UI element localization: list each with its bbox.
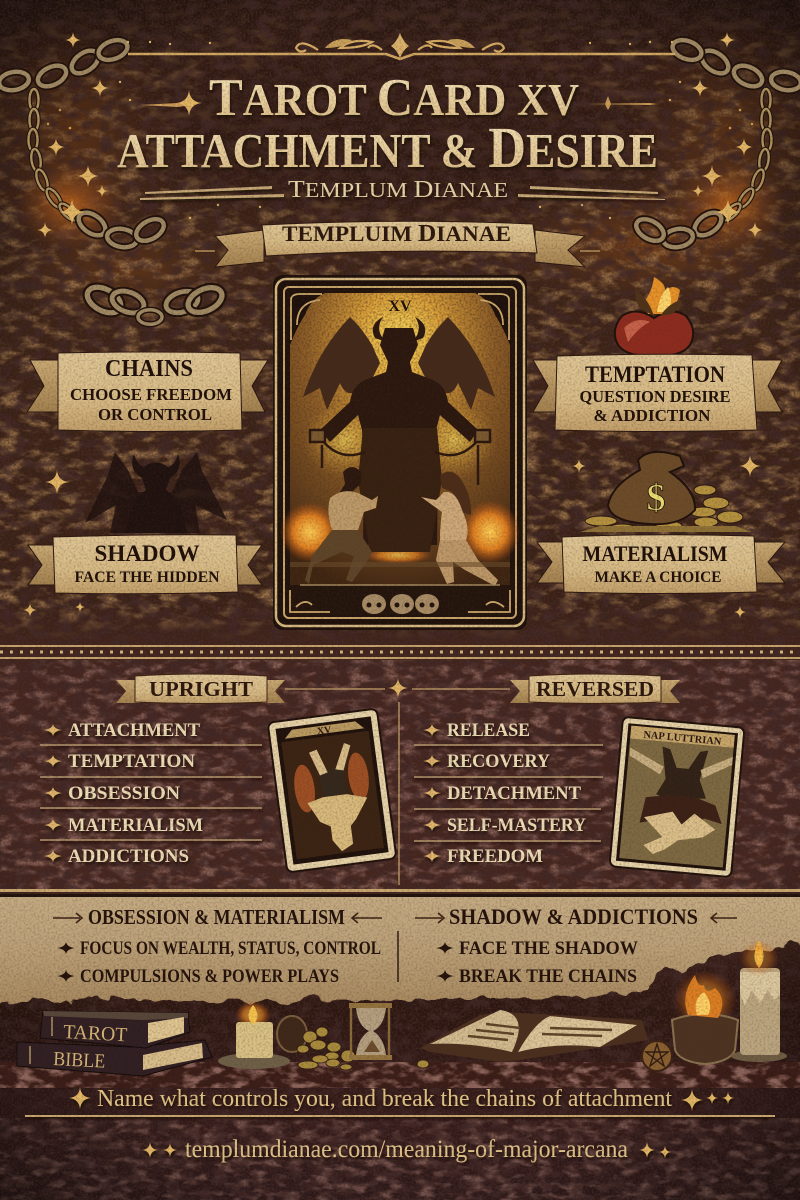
upright heading banner: UPRIGHT (149, 677, 253, 701)
title sparkles (140, 90, 657, 116)
banner: templuim dianae (195, 221, 600, 267)
heading: materialism: MATERIALISM (582, 541, 728, 566)
icon: money bag and coins (580, 452, 752, 532)
parchment text: left column: FOCUS ON WEALTH, STATUS, CONTROL (80, 938, 381, 959)
card: upright small (268, 708, 396, 873)
icon: small candle (218, 1001, 290, 1069)
card: reversed small (609, 717, 745, 877)
parchment text: right column: BREAK THE CHAINS (459, 966, 637, 987)
motto (25, 1086, 775, 1116)
section divider (0, 645, 800, 659)
list: upright: ADDICTIONS (68, 846, 189, 867)
devil chains (310, 430, 490, 485)
list: reversed: DETACHMENT (447, 783, 581, 804)
reversed heading banner (510, 674, 680, 704)
icon: burning bowl (672, 970, 738, 1064)
text: make a choice: MAKE A CHOICE (594, 569, 722, 586)
url footer: templumdianae.com/meaning-of-major-arcana (185, 1136, 628, 1163)
subtitle: TEMPLUM DIANAE (288, 177, 508, 203)
list: upright: ATTACHMENT (68, 720, 200, 741)
card: reversed small: NAP LUTTRIAN (643, 730, 722, 748)
icon: books: BIBLE (53, 1048, 106, 1073)
kneeling man (305, 467, 378, 584)
text: and addiction: & ADDICTION (594, 406, 711, 425)
icon: big candle (731, 940, 787, 1062)
text: or control: OR CONTROL (98, 405, 212, 424)
parchment text: right column (398, 904, 737, 987)
chains: top right corner (539, 32, 800, 250)
main tarot card (273, 275, 527, 630)
list: reversed: SELF-MASTERY (447, 815, 586, 836)
text: face the hidden: FACE THE HIDDEN (74, 569, 220, 586)
chains: top left corner (0, 32, 261, 250)
icon: open book (420, 1010, 648, 1062)
list: reversed: RELEASE (447, 720, 530, 741)
panel: materialism (537, 535, 785, 594)
panel: shadow (28, 535, 262, 594)
list: upright: TEMPTATION (68, 751, 195, 772)
icon: broken chain (83, 282, 226, 324)
card corner flourishes (290, 293, 510, 612)
list: upright (40, 720, 262, 867)
icon: books (17, 1011, 212, 1076)
list: upright: MATERIALISM (68, 815, 203, 836)
icon: pentacle (642, 1041, 672, 1071)
card art background (290, 293, 510, 589)
list: upright: OBSESSION (68, 783, 180, 804)
title: TAROT CARD XV (209, 69, 579, 127)
banner: templuim dianae: TEMPLUIM DIANAE (282, 221, 511, 247)
kneeling woman (421, 471, 498, 586)
title: ATTACHMENT & DESIRE (117, 115, 658, 180)
heading: shadow: SHADOW (94, 541, 200, 566)
parchment text: right column: SHADOW & ADDICTIONS (449, 904, 698, 929)
top frame ornament (128, 33, 675, 59)
icon: devil shadow (85, 452, 227, 533)
text: question desire: QUESTION DESIRE (580, 387, 730, 406)
heading: chains: CHAINS (105, 356, 193, 382)
reversed heading banner: REVERSED (536, 677, 654, 701)
upright heading banner (116, 674, 285, 704)
panel: chains (27, 352, 268, 432)
icon: pot and coins (277, 1016, 429, 1070)
list: reversed: FREEDOM (447, 846, 543, 867)
title (117, 69, 658, 180)
subtitle (140, 177, 665, 203)
parchment text: left column: OBSESSION & MATERIALISM (88, 905, 345, 929)
card: upright small: XV (316, 725, 333, 737)
card fires (280, 500, 520, 564)
text: choose freedom: CHOOSE FREEDOM (70, 385, 232, 404)
devil silhouette (303, 317, 495, 552)
parchment text: left column: COMPULSIONS & POWER PLAYS (80, 966, 339, 987)
icon: books: TAROT (63, 1021, 128, 1046)
parchment band (0, 880, 800, 1005)
list: reversed (414, 720, 603, 867)
panel: temptation (533, 354, 782, 432)
motto: Name what controls you, and break the chains of attachment (97, 1086, 672, 1112)
icon: money bag and coins: $ (646, 477, 666, 519)
table ledge (0, 1062, 800, 1088)
parchment text: right column: FACE THE SHADOW (459, 938, 638, 959)
center star and rules (285, 678, 510, 885)
icon: hourglass (349, 1003, 392, 1060)
parchment text: left column (53, 905, 382, 987)
icon: apple (615, 277, 693, 356)
sparkles around panels (23, 455, 761, 618)
card numeral: XV (388, 298, 412, 315)
card base and skulls (290, 562, 510, 615)
list: reversed: RECOVERY (447, 751, 550, 772)
heading: temptation: TEMPTATION (585, 362, 725, 387)
